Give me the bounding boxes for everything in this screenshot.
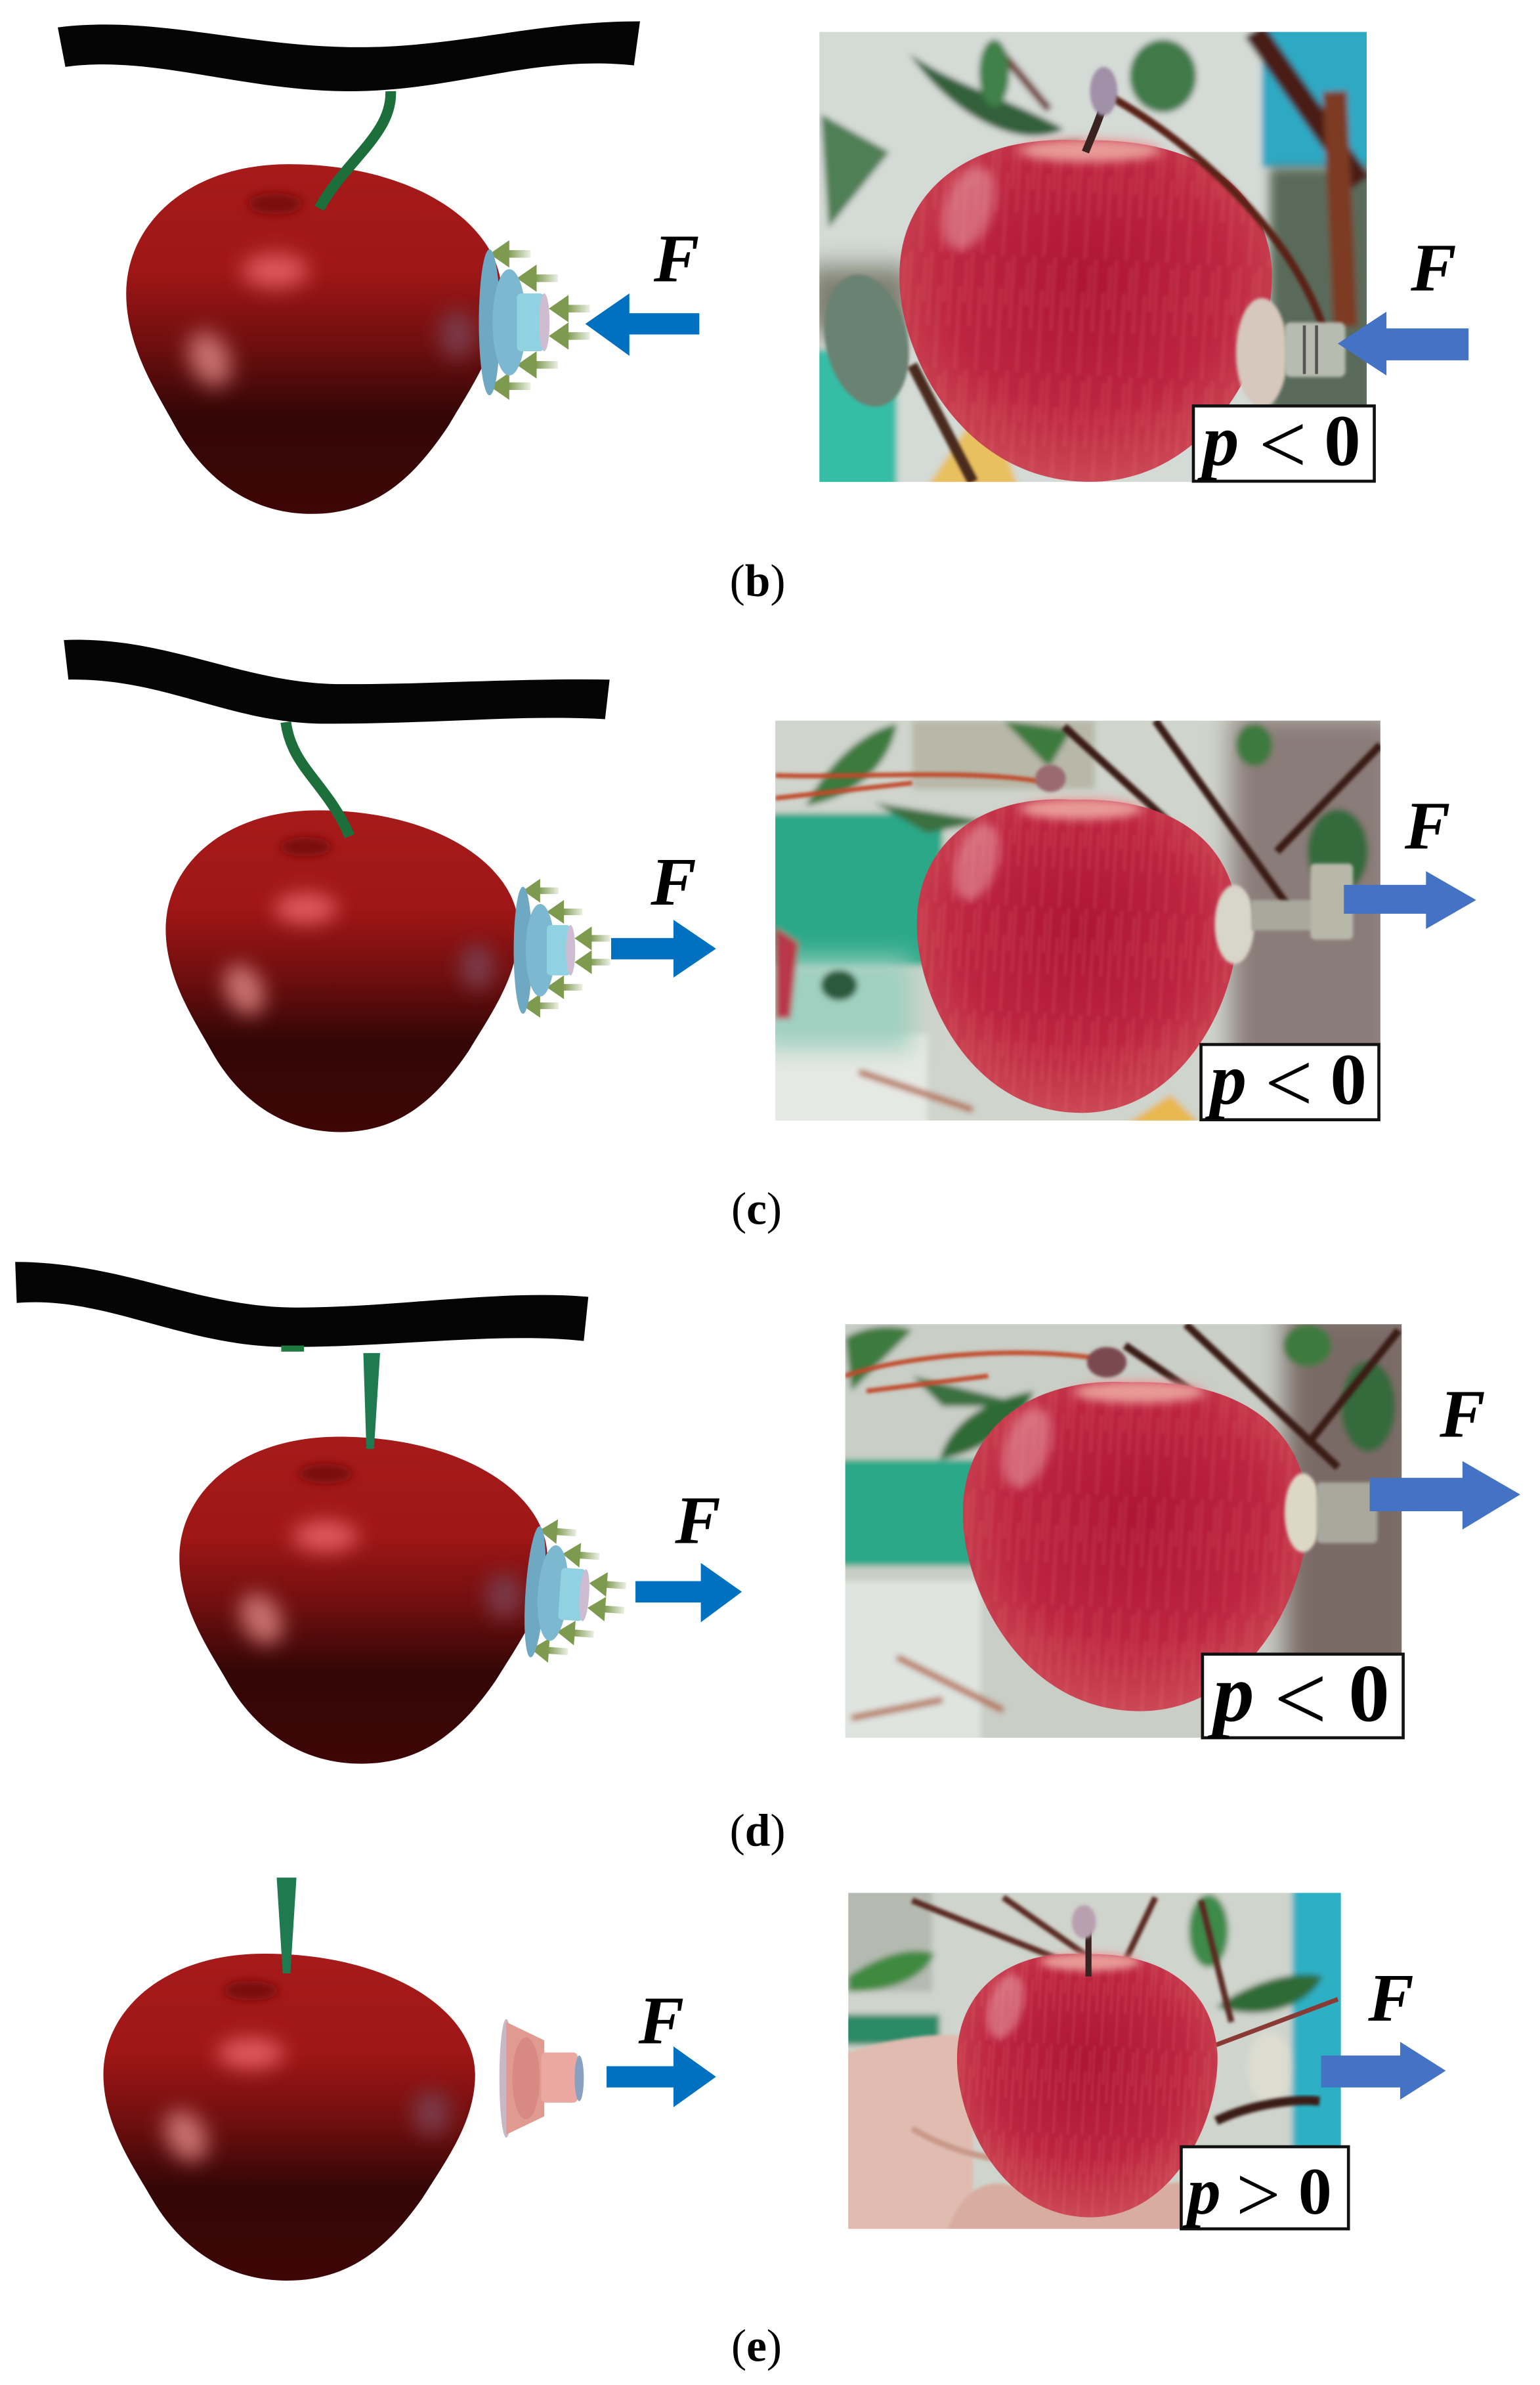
stem <box>276 1878 297 1973</box>
apple <box>179 1437 547 1764</box>
force label: F <box>674 1482 721 1558</box>
panel: d model <box>15 1262 742 1764</box>
pressure label: p <box>1207 1649 1254 1740</box>
pressure label: p <box>1205 1039 1247 1120</box>
force label: F <box>1404 787 1450 863</box>
force arrow <box>1338 312 1468 376</box>
pressure label: p <box>1197 401 1239 482</box>
pressure label <box>1203 1647 1403 1751</box>
panel: d photo <box>821 1308 1520 1751</box>
force label: F <box>1410 229 1457 305</box>
stem <box>363 1353 380 1449</box>
detached suction cup <box>500 2019 584 2138</box>
caption e: (e) <box>731 2321 782 2372</box>
pressure label: < <box>1274 1647 1327 1751</box>
suction cup <box>514 879 610 1018</box>
panel: e photo <box>848 1893 1445 2231</box>
caption c: (c) <box>731 1184 782 1234</box>
photo scene <box>845 1324 1402 1738</box>
hand <box>848 2032 1180 2229</box>
pressure label <box>1193 397 1375 492</box>
force arrow <box>586 293 699 356</box>
force arrow <box>1344 871 1476 929</box>
panel: e model <box>103 1878 716 2281</box>
caption b: (b) <box>730 556 786 607</box>
panel: c photo <box>745 699 1476 1140</box>
force label: F <box>653 220 699 296</box>
force arrow <box>635 1563 742 1622</box>
photo scene <box>819 32 1367 482</box>
panel: b model <box>58 21 699 514</box>
photo scene <box>775 721 1380 1121</box>
pressure label: 0 <box>1298 2155 1332 2229</box>
pressure label <box>1201 1036 1379 1130</box>
apple <box>103 1954 475 2281</box>
caption d: (d) <box>730 1806 786 1857</box>
apple <box>126 164 502 514</box>
pressure label: 0 <box>1324 401 1361 482</box>
branch <box>64 640 610 723</box>
force arrow <box>611 920 716 978</box>
pressure label: < <box>1259 397 1307 492</box>
apple <box>165 810 519 1132</box>
force label: F <box>1439 1376 1486 1452</box>
force label: F <box>1367 1960 1414 2036</box>
pressure label <box>1181 2147 1348 2239</box>
force label: F <box>650 844 696 920</box>
pressure label: < <box>1265 1036 1313 1130</box>
photo scene <box>848 1893 1341 2229</box>
pressure label: > <box>1236 2152 1281 2239</box>
pressure label: 0 <box>1330 1039 1367 1120</box>
branch <box>15 1262 588 1347</box>
panel: b photo <box>790 0 1468 502</box>
force arrow <box>1321 2042 1445 2099</box>
force label: F <box>638 1983 684 2059</box>
panel: c model <box>64 640 716 1132</box>
pressure label: p <box>1182 2155 1221 2229</box>
stem <box>286 722 350 836</box>
stem <box>319 91 391 208</box>
force arrow <box>607 2046 716 2107</box>
branch <box>58 21 640 91</box>
stem stub <box>281 1346 304 1352</box>
suction cup <box>479 240 590 400</box>
pressure label: 0 <box>1348 1649 1390 1740</box>
suction cup <box>521 1517 630 1667</box>
force arrow <box>1370 1461 1520 1530</box>
